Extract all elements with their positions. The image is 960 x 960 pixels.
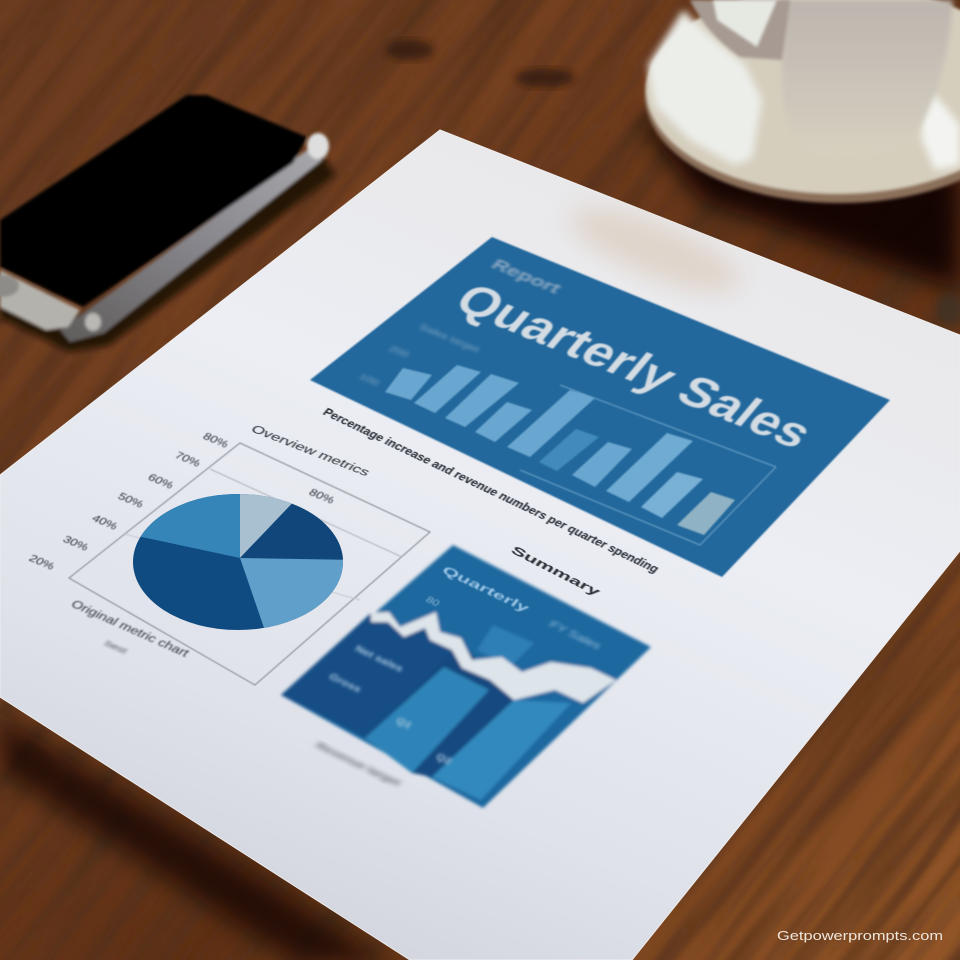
watermark: Getpowerprompts.com — [777, 928, 943, 943]
banner title: Quarterly Sales — [445, 275, 823, 458]
axis labels: 50% — [115, 491, 146, 510]
lower right chart — [281, 544, 651, 808]
chart small labels — [356, 322, 482, 388]
axis labels: 20% — [26, 553, 57, 572]
banner small heading: Report — [487, 257, 565, 297]
axis labels: 30% — [60, 534, 91, 553]
lower chart labels — [423, 564, 604, 652]
lower chart caption: Revenue target — [313, 741, 403, 789]
lower right chart: Gross — [326, 672, 364, 695]
coffee cup and saucer — [645, 0, 960, 203]
pie slices — [133, 494, 343, 630]
chart small labels: 100 — [356, 372, 382, 388]
phone — [0, 95, 335, 352]
text line under banner: Percentage increase and revenue numbers per quarter spending — [320, 405, 662, 575]
chart small labels: 200 — [386, 344, 412, 360]
pie caption: Original metric chart — [68, 598, 192, 659]
lower right chart: Net sales — [352, 644, 405, 674]
chart small labels: Sales target — [416, 322, 482, 354]
axis labels: 60% — [145, 472, 176, 491]
lower chart heading: Summary — [508, 544, 604, 598]
axis labels: 70% — [172, 450, 203, 469]
axis labels: 80% — [306, 487, 337, 506]
bar chart — [385, 365, 776, 545]
lower right chart: Q2 — [433, 752, 454, 767]
axis labels: 40% — [89, 513, 120, 532]
chart grid — [69, 443, 430, 685]
pie chart panel: best — [102, 639, 129, 656]
banner: Quarterly Sales — [310, 237, 890, 577]
axis labels: 80% — [200, 431, 231, 450]
lower right chart: Q1 — [393, 716, 414, 731]
lower chart labels: Quarterly — [439, 564, 533, 615]
pie chart panel — [26, 423, 430, 685]
pie heading: Overview metrics — [248, 423, 373, 479]
lower chart labels: 80 — [423, 595, 442, 609]
axis labels — [26, 431, 337, 572]
lower chart labels: FY Sales — [546, 618, 604, 652]
